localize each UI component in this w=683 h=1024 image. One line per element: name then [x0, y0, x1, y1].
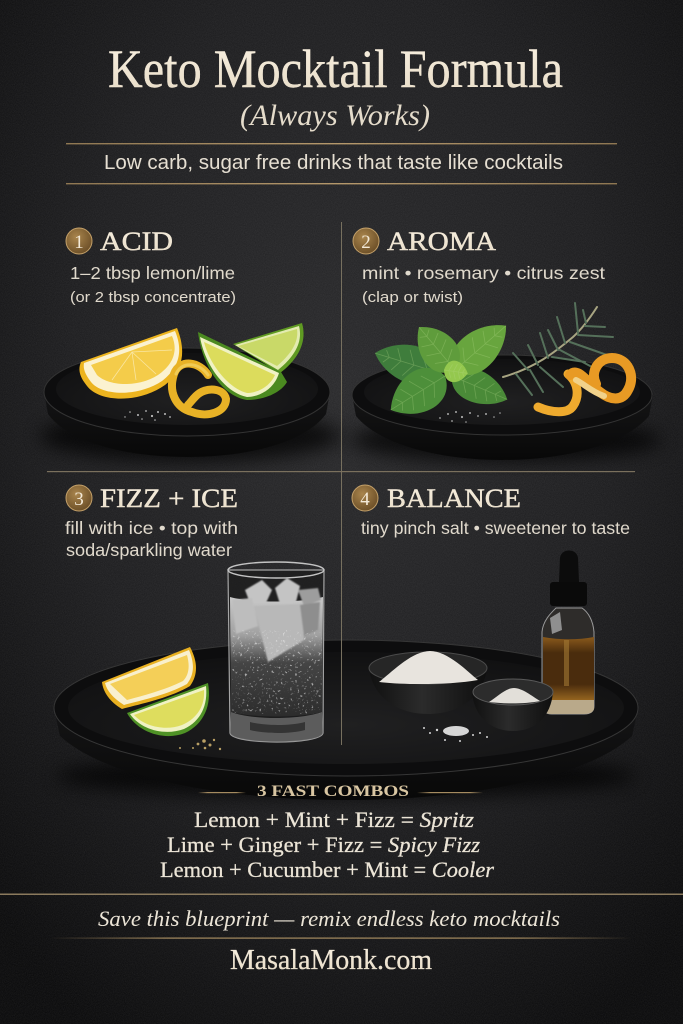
heading: acid: 1: [74, 232, 84, 253]
rosemary sprig: [503, 303, 613, 395]
glass of sparkling water: [228, 562, 324, 742]
salt specks: [124, 410, 171, 421]
heading: acid: ACID: [100, 227, 173, 256]
panel: step 3 fizz and ice: [65, 484, 238, 560]
mint leaves: [369, 311, 518, 427]
heading: fizz + ice: FIZZ + ICE: [100, 484, 238, 513]
footer: [0, 894, 683, 976]
panel: fast combos: [160, 783, 494, 882]
text: aroma details: mint • rosemary • citrus zest: [362, 263, 605, 283]
website: MasalaMonk.com: [230, 945, 432, 976]
spilled salt: [423, 726, 488, 742]
panel: step 4 balance: [352, 484, 630, 538]
heading: acid: [66, 227, 173, 256]
bubbles: [232, 630, 322, 714]
combos list: Lemon + Mint + Fizz = Spritz: [194, 807, 474, 832]
panel: step 2 aroma: [353, 227, 605, 306]
large plate: [54, 640, 638, 800]
text: acid details: 1–2 tbsp lemon/lime: [70, 263, 235, 283]
text: acid details: [70, 263, 236, 306]
front lime wedge: [198, 332, 287, 400]
plate 2: [351, 355, 661, 462]
orange peel curl: [538, 358, 631, 412]
heading: aroma: [353, 227, 496, 256]
back lime wedge: [233, 323, 304, 373]
heading: aroma: AROMA: [387, 227, 496, 256]
subtitle: always works: (Always Works): [240, 99, 430, 132]
text: balance details: tiny pinch salt • sweetener to taste: [361, 518, 630, 538]
large salt bowl: [369, 651, 487, 714]
text: acid details: (or 2 tbsp concentrate): [70, 289, 236, 306]
combos list: Lemon + Cucumber + Mint = Cooler: [160, 857, 494, 882]
heading: aroma: 2: [361, 232, 371, 253]
panel: step 1 acid: [66, 227, 236, 306]
call to action: Save this blueprint — remix endless keto mocktails: [98, 906, 560, 931]
dropper bottle: [542, 550, 594, 714]
combos heading: 3 FAST COMBOS: [257, 783, 409, 800]
heading: fizz + ice: 3: [74, 489, 84, 510]
quadrant dividers: [47, 222, 635, 745]
ice cubes: [232, 578, 321, 662]
text: fizz details: fill with ice • top with: [65, 518, 238, 538]
tagline with rules: Low carb, sugar free drinks that taste like cocktails: [104, 152, 563, 174]
small salt bowl: [472, 679, 553, 731]
plate 2 scene: aroma: [351, 303, 661, 462]
plate 1: [40, 348, 340, 462]
ginger crumbs: [179, 739, 221, 750]
text: fizz details: soda/sparkling water: [66, 540, 232, 560]
lemon wedge: [102, 647, 196, 709]
title: Keto Mocktail Formula: [108, 39, 563, 99]
text: fizz details: [65, 518, 238, 560]
heading: balance: 4: [360, 489, 370, 510]
plate 3 scene: fizz and balance: [54, 550, 638, 800]
lime wedge: [127, 683, 209, 736]
combos list: Lime + Ginger + Fizz = Spicy Fizz: [167, 832, 480, 857]
text: aroma details: (clap or twist): [362, 289, 463, 306]
combos list: [160, 807, 494, 882]
heading: balance: BALANCE: [387, 484, 521, 513]
salt specks: [439, 411, 501, 423]
plate 1 scene: acid: [40, 323, 340, 462]
lemon wedge: [79, 328, 182, 399]
text: aroma details: [362, 263, 605, 306]
lemon peel curl: [172, 364, 226, 414]
